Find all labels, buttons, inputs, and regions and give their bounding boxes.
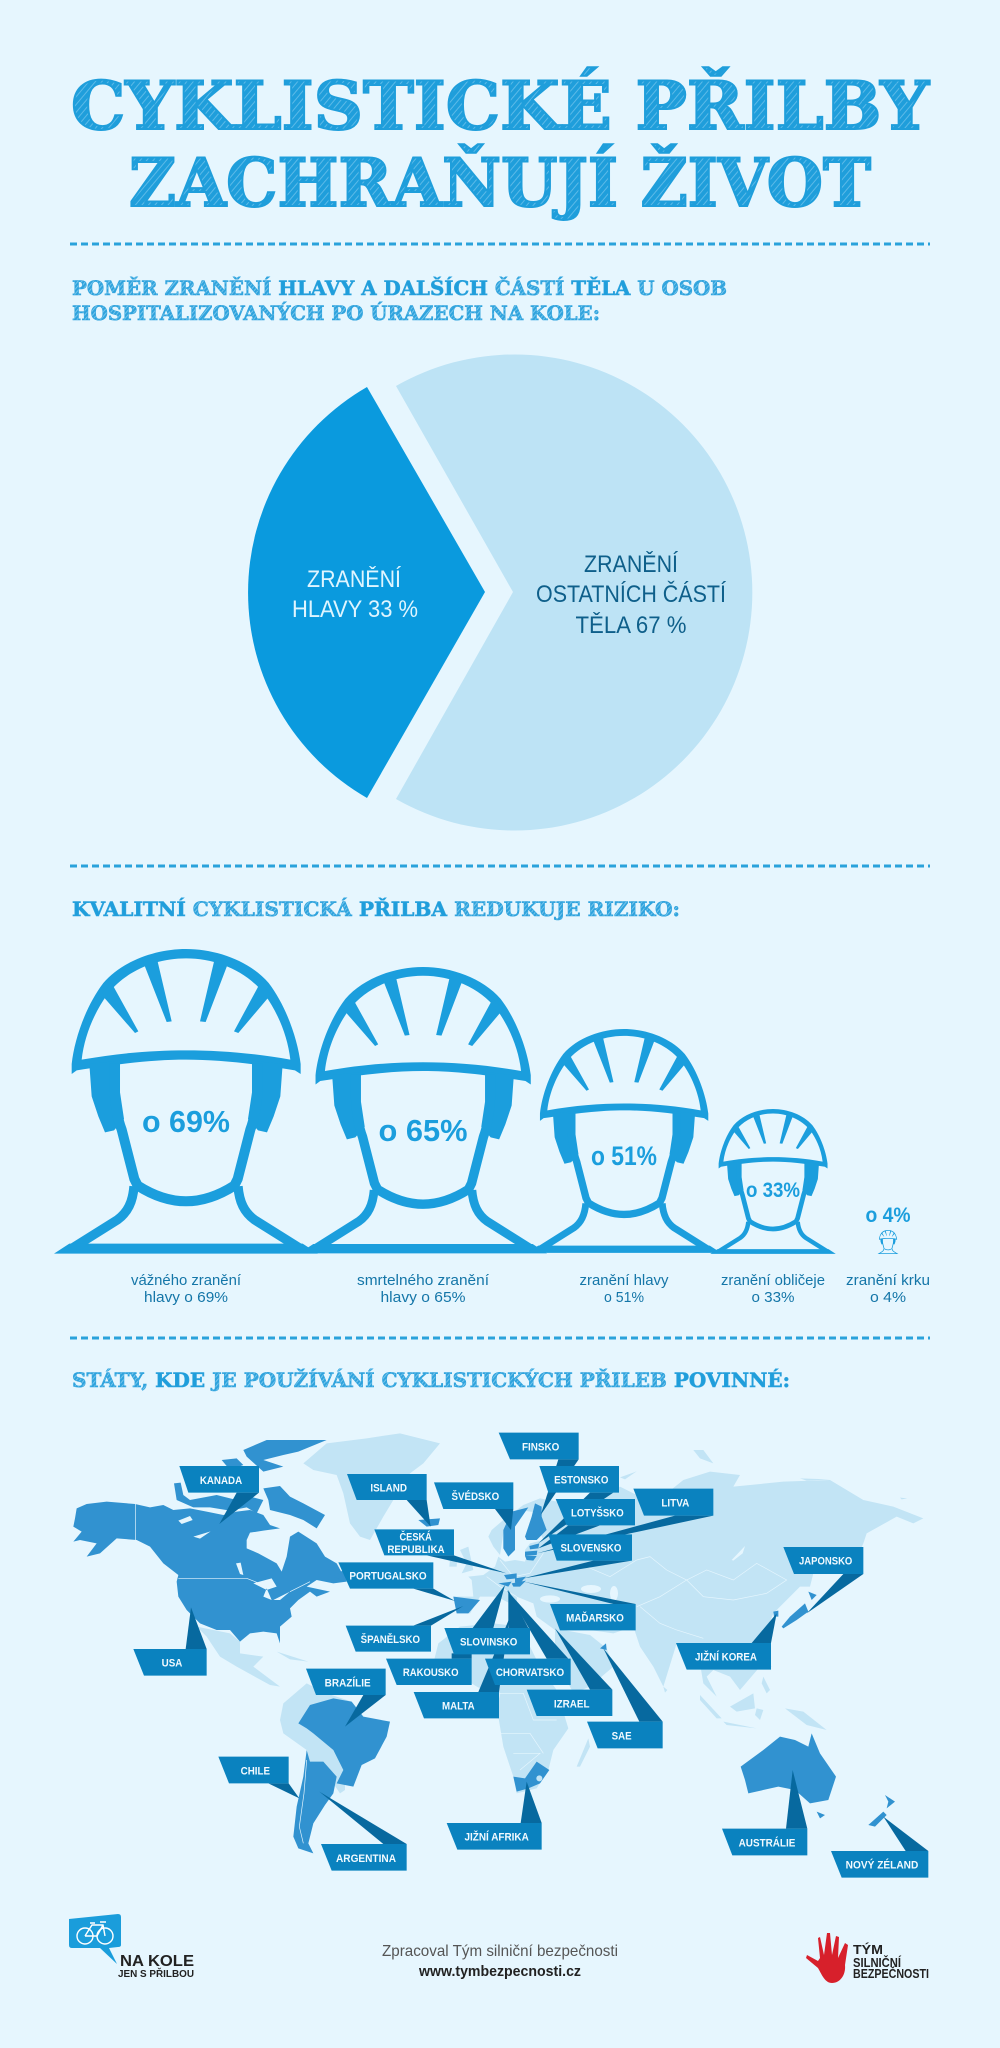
heading: helmet reduces risk: KVALITNÍ CYKLISTICKÁ PŘILBA REDUKUJE RIZIKO:	[72, 897, 680, 921]
label: head injuries: HLAVY 33 %	[292, 596, 418, 623]
Norway	[488, 1498, 557, 1555]
label: head injuries: ZRANĚNÍ	[307, 566, 401, 593]
USA, Canada mainland	[73, 1502, 347, 1643]
label: Jižní Korea: JIŽNÍ KOREA	[695, 1651, 757, 1664]
heading: head injury ratio: POMĚR ZRANĚNÍ HLAVY A DALŠÍCH ČÁSTÍ TĚLA U OSOB	[72, 275, 727, 300]
icon: head with helmet 69 %	[54, 949, 318, 1254]
icon: speech bubble with bicycle	[69, 1914, 121, 1964]
Arabia	[555, 1628, 613, 1693]
icon: head with helmet 69 %: o 69%	[142, 1104, 230, 1139]
icon: head with helmet 51 %: o 51%	[591, 1141, 657, 1171]
label: Lotyšsko: LOTYŠSKO	[571, 1507, 624, 1520]
label: USA: USA	[162, 1658, 182, 1670]
logo: Na kole jen s přilbou	[69, 1914, 194, 1980]
label: Slovinsko: SLOVINSKO	[460, 1636, 517, 1648]
map: highlighted countries west	[73, 1440, 440, 1853]
label: other body parts: TĚLA 67 %	[576, 612, 686, 639]
label: Jižní Korea	[676, 1613, 777, 1670]
label: Izrael: IZRAEL	[554, 1698, 590, 1710]
icon: head with helmet 51 %	[527, 1029, 721, 1253]
label: Brazílie	[306, 1669, 386, 1727]
label: Malta: MALTA	[442, 1701, 475, 1713]
helmet captions: o 33%	[752, 1289, 794, 1306]
label: Portugalsko: PORTUGALSKO	[349, 1571, 427, 1583]
Eurasia mainland	[453, 1472, 923, 1697]
label: Kanada: KANADA	[200, 1475, 242, 1487]
label: Litva: LITVA	[661, 1498, 689, 1510]
label: Kanada	[179, 1466, 259, 1524]
title: ZACHRAŇUJÍ ŽIVOT	[129, 144, 871, 222]
label: Lotyšsko	[538, 1499, 635, 1548]
heading: countries with mandatory helmets: STÁTY, KDE JE POUŽÍVÁNÍ CYKLISTICKÝCH PŘILEB POVINNÉ:	[72, 1368, 790, 1392]
label: Argentina: ARGENTINA	[336, 1853, 396, 1865]
helmet captions: zranění obličeje	[721, 1272, 825, 1289]
label: Island: ISLAND	[370, 1483, 407, 1495]
credit text: www.tymbezpecnosti.cz	[418, 1963, 581, 1980]
logo: Tým silniční bezpečnosti: BEZPEČNOSTI	[853, 1966, 929, 1981]
label: Nový Zéland	[831, 1817, 928, 1878]
Argentina, Chile	[293, 1750, 337, 1853]
label: head injuries	[292, 566, 418, 623]
helmet captions: smrtelného zranění	[357, 1272, 490, 1289]
map: highlighted countries Europe	[453, 1503, 547, 1613]
label: Česká republika	[374, 1529, 507, 1573]
label: Chile	[218, 1757, 299, 1798]
label: USA	[133, 1607, 207, 1676]
label: Maďarsko	[523, 1582, 636, 1630]
label: Estonsko: ESTONSKO	[554, 1474, 609, 1486]
helmet captions: o 51%	[604, 1289, 644, 1306]
label: Slovensko	[523, 1534, 632, 1578]
label: Finsko: FINSKO	[522, 1442, 559, 1454]
label: Česká republika: ČESKÁ	[399, 1530, 432, 1543]
helmet captions	[131, 1272, 930, 1306]
slice: other body parts	[396, 354, 752, 831]
helmet captions: hlavy o 65%	[380, 1289, 466, 1306]
world map	[73, 1433, 923, 1853]
label: Švédsko	[434, 1482, 513, 1530]
label: Austrálie	[722, 1770, 807, 1855]
label: Nový Zéland: NOVÝ ZÉLAND	[846, 1858, 918, 1871]
label: Jižní Afrika: JIŽNÍ AFRIKA	[464, 1831, 529, 1844]
helmet captions: zranění hlavy	[580, 1272, 669, 1289]
Britain	[460, 1547, 473, 1573]
map: light land west	[197, 1433, 568, 1793]
icon: head with helmet 33 %	[710, 1109, 836, 1254]
label: SAE: SAE	[612, 1730, 632, 1742]
icon: red hand	[806, 1933, 848, 1983]
helmet captions: vážného zranění	[131, 1272, 242, 1289]
label: Austrálie: AUSTRÁLIE	[739, 1836, 796, 1849]
label: other body parts: OSTATNÍCH ČÁSTÍ	[536, 580, 726, 608]
label: Brazílie: BRAZÍLIE	[325, 1676, 371, 1689]
label: Španělsko	[346, 1606, 463, 1652]
label: Maďarsko: MAĎARSKO	[566, 1612, 624, 1625]
Brazil	[298, 1698, 390, 1787]
label: other body parts: ZRANĚNÍ	[584, 551, 678, 578]
label: Litva	[537, 1489, 713, 1553]
heading: head injury ratio: HOSPITALIZOVANÝCH PO ÚRAZECH NA KOLE:	[72, 300, 600, 325]
logo: Tým silniční bezpečnosti: SILNIČNÍ	[853, 1955, 901, 1970]
label: Rakousko	[386, 1585, 505, 1685]
label: Slovinsko	[444, 1590, 530, 1654]
label: Slovensko: SLOVENSKO	[560, 1543, 622, 1555]
label: other body parts	[536, 551, 726, 639]
label: Portugalsko	[338, 1562, 455, 1601]
pie chart	[248, 354, 752, 831]
label: SAE	[587, 1648, 663, 1748]
logo: Tým silniční bezpečnosti	[806, 1933, 929, 1983]
heading: head injury ratio	[72, 275, 727, 325]
slice: head injuries	[248, 387, 485, 798]
Iceland	[418, 1518, 440, 1527]
icon: head with helmet 65 %: o 65%	[378, 1113, 468, 1148]
label: Island	[347, 1474, 431, 1527]
helmet captions: hlavy o 69%	[144, 1289, 228, 1306]
map: light land east	[449, 1450, 923, 1767]
credit text: Zpracoval Tým silniční bezpečnosti	[382, 1943, 618, 1960]
icon: head with helmet 33 %: o 33%	[746, 1179, 800, 1202]
Ireland	[449, 1557, 457, 1567]
label: Rakousko: RAKOUSKO	[403, 1667, 459, 1679]
logo: Na kole jen s přilbou: JEN S PŘILBOU	[118, 1967, 194, 1980]
icon: head with helmet 4 %: o 4%	[866, 1204, 911, 1227]
label: Chile: CHILE	[241, 1765, 270, 1777]
icon: head with helmet 4 %	[866, 1204, 911, 1254]
map: highlighted countries east	[513, 1592, 895, 1827]
label: Chorvatsko: CHORVATSKO	[496, 1667, 564, 1679]
helmet captions: o 4%	[870, 1289, 906, 1306]
label: Malta	[414, 1618, 509, 1718]
logo: Tým silniční bezpečnosti: TÝM	[853, 1942, 883, 1957]
title	[71, 67, 930, 222]
label: Izrael	[527, 1628, 612, 1716]
label: Estonsko	[538, 1466, 619, 1543]
label: Španělsko: ŠPANĚLSKO	[361, 1633, 420, 1646]
label: Jižní Afrika	[447, 1782, 542, 1850]
logo: Na kole jen s přilbou: NA KOLE	[120, 1953, 194, 1970]
label: Švédsko: ŠVÉDSKO	[451, 1490, 499, 1503]
label: Japonsko	[783, 1547, 863, 1613]
icon: head with helmet 65 %	[299, 967, 547, 1253]
label: Finsko	[499, 1433, 579, 1515]
label: Japonsko: JAPONSKO	[799, 1556, 852, 1568]
label: Argentina	[319, 1792, 407, 1871]
credit text	[382, 1943, 618, 1980]
map: white borders	[473, 1553, 787, 1770]
helmet captions: zranění krku	[846, 1272, 930, 1289]
label: Česká republika: REPUBLIKA	[387, 1544, 445, 1556]
map: white lines in highlighted land	[135, 1504, 310, 1843]
label: Chorvatsko	[485, 1590, 571, 1685]
title: CYKLISTICKÉ PŘILBY	[71, 67, 930, 145]
